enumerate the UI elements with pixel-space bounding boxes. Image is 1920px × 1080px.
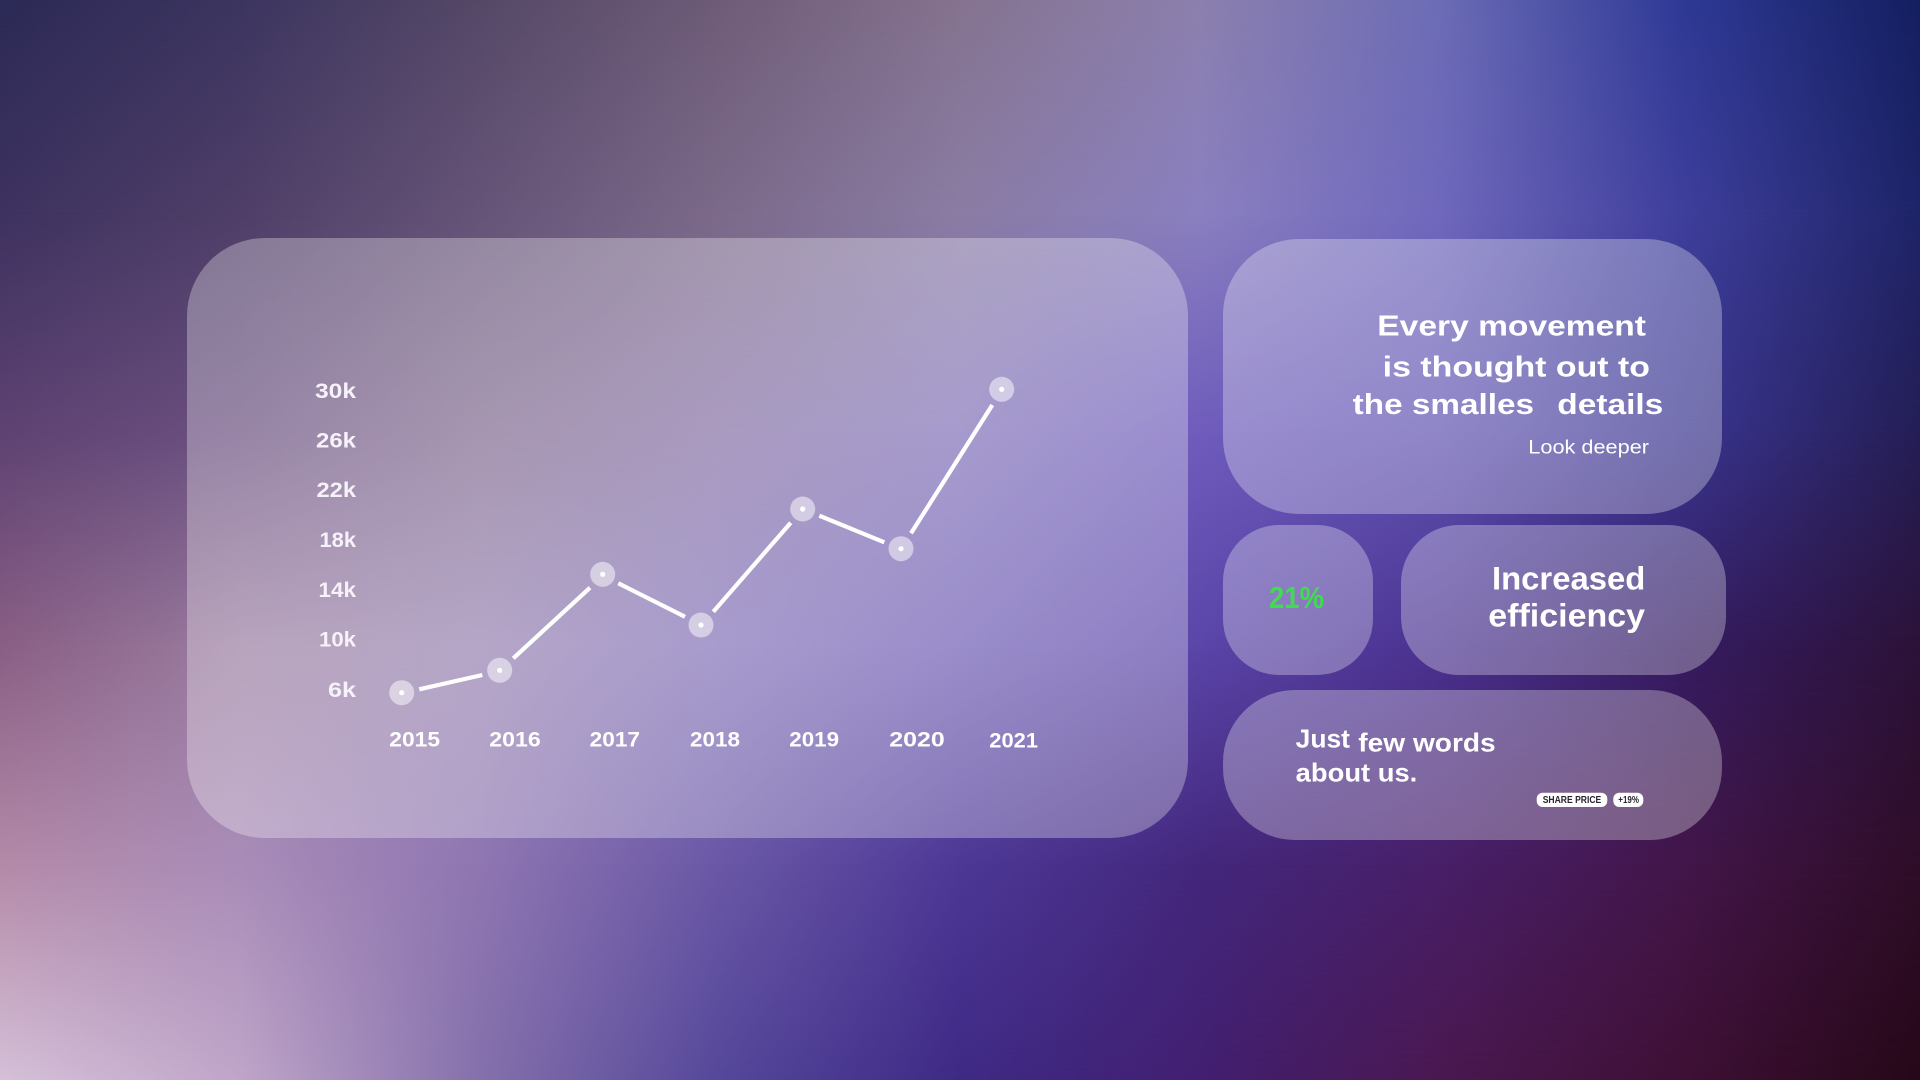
quote heading xyxy=(1353,311,1663,421)
quote heading: is thought out to xyxy=(1383,352,1650,384)
chart: y-axis labels xyxy=(315,380,356,702)
chart: y-axis labels: 10k xyxy=(319,629,356,652)
chart: y-axis labels: 30k xyxy=(315,380,356,403)
chart: x-axis year labels: 2020 xyxy=(889,729,945,752)
efficiency heading xyxy=(1488,560,1645,634)
chart: x-axis year labels: 2018 xyxy=(690,729,740,752)
tag: share price xyxy=(1537,793,1607,807)
efficiency heading: efficiency xyxy=(1488,598,1645,634)
tag: share price: SHARE PRICE xyxy=(1543,795,1602,806)
quote subtext: Look deeper xyxy=(1528,436,1650,458)
chart: x-axis year labels: 2017 xyxy=(590,729,640,752)
panel: 21% stat card xyxy=(1223,525,1373,675)
panel: about card xyxy=(1223,690,1722,840)
about heading: about us. xyxy=(1296,758,1417,788)
chart: y-axis labels: 6k xyxy=(328,679,356,702)
chart: x-axis year labels: 2019 xyxy=(789,729,839,752)
tag: +19%: +19% xyxy=(1618,795,1639,806)
chart: x-axis year labels: 2015 xyxy=(389,729,440,752)
chart: line segments xyxy=(419,405,992,689)
about heading: few words xyxy=(1358,728,1496,758)
chart: y-axis labels: 26k xyxy=(316,430,356,453)
chart: y-axis labels: 14k xyxy=(318,579,356,602)
chart: x-axis year labels: 2021 xyxy=(989,730,1038,752)
chart: data points xyxy=(389,377,1014,705)
stat value: 21% xyxy=(1269,580,1324,615)
chart: y-axis labels: 18k xyxy=(320,529,356,552)
chart: x-axis year labels xyxy=(389,729,1038,752)
tag: +19% xyxy=(1613,793,1643,807)
about heading: Just xyxy=(1296,724,1350,754)
panel: line chart card xyxy=(187,238,1188,838)
quote heading: Every movement xyxy=(1377,311,1646,343)
about heading xyxy=(1296,724,1496,788)
efficiency heading: Increased xyxy=(1492,560,1645,596)
chart: x-axis year labels: 2016 xyxy=(489,729,541,752)
panel: quote card xyxy=(1223,239,1722,514)
chart: y-axis labels: 22k xyxy=(316,479,356,502)
panel: increased efficiency card xyxy=(1401,525,1726,675)
quote heading: details xyxy=(1557,389,1663,421)
quote heading: the smalles xyxy=(1353,389,1534,421)
